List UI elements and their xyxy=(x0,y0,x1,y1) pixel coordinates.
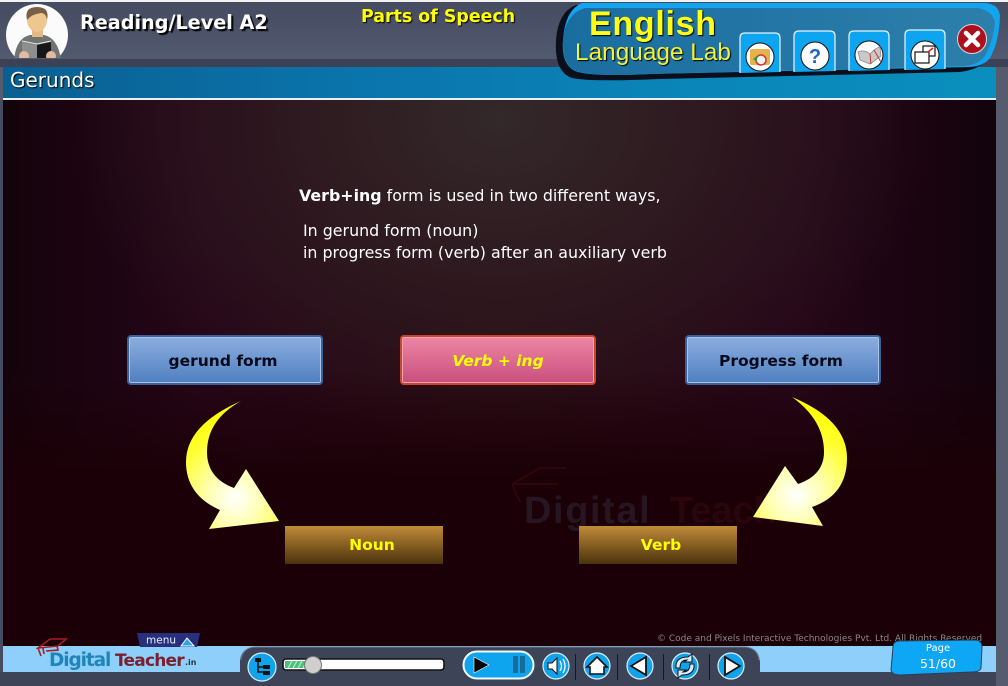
box: gerund form: gerund form xyxy=(168,352,278,370)
box: progress form: Progress form xyxy=(719,352,843,370)
icon: close button xyxy=(958,24,986,54)
arrow: gerund form to noun xyxy=(186,401,279,529)
box: noun: Noun xyxy=(349,536,395,554)
header bar xyxy=(0,2,1008,59)
watermark word teacher: Teacher xyxy=(670,490,813,532)
heading: parts of speech: Parts of Speech xyxy=(361,7,515,27)
toolbar tabs and icons xyxy=(739,24,987,73)
tab: window xyxy=(905,30,945,70)
logo word digital: Digital xyxy=(49,650,110,671)
tab: history xyxy=(740,33,780,73)
title underline xyxy=(3,98,996,100)
button: pause xyxy=(513,656,525,673)
content panel xyxy=(3,100,996,646)
playback control bar xyxy=(240,646,760,682)
title bar xyxy=(3,67,996,98)
title: english: English xyxy=(589,5,717,43)
icon: reading student avatar xyxy=(6,4,68,58)
logo: digital teacher xyxy=(36,638,196,671)
page counter xyxy=(890,640,982,676)
text block: two uses: In gerund form (noun) xyxy=(303,221,478,240)
logo word teacher: Teacher xyxy=(115,651,184,671)
logo cap icon xyxy=(36,638,68,656)
badge: english language lab xyxy=(556,3,1000,80)
box: verb + ing: Verb + ing xyxy=(452,352,544,370)
icon: tree menu xyxy=(248,653,276,681)
title: gerunds: Gerunds xyxy=(10,68,94,92)
footer dark band xyxy=(0,672,996,686)
tab: help: ? xyxy=(809,46,821,68)
logo suffix: .in xyxy=(185,658,196,667)
arrow: progress form to verb xyxy=(753,397,847,526)
text block: introduction: Verb+ing form is used in two different ways, xyxy=(299,186,661,205)
progress slider xyxy=(283,656,444,674)
lower content shade xyxy=(3,370,996,646)
box: progress form xyxy=(685,335,881,385)
text block: two uses xyxy=(303,221,667,262)
title: language lab: Language Lab xyxy=(575,39,731,66)
heading: reading level: Reading/Level A2 xyxy=(80,11,268,34)
text block: two uses: in progress form (verb) after an auxiliary verb xyxy=(303,243,667,262)
watermark: digital teacher xyxy=(512,467,813,532)
tab: book xyxy=(849,31,889,71)
copyright: © Code and Pixels Interactive Technologies Pvt. Ltd. All Rights Reserved xyxy=(657,634,982,644)
icon: home xyxy=(584,653,610,679)
watermark word digital: Digital xyxy=(524,490,651,532)
button: play xyxy=(464,652,534,678)
menu tab xyxy=(137,633,200,647)
page number: 51/60 xyxy=(920,656,956,671)
icon: sound xyxy=(543,653,569,679)
box: noun xyxy=(285,526,443,564)
footer light blue band xyxy=(3,646,996,672)
top edge xyxy=(0,0,1008,2)
box: gerund form xyxy=(127,335,323,385)
header lower band xyxy=(0,59,1008,67)
box: verb + ing xyxy=(400,335,596,385)
watermark cap xyxy=(512,467,566,502)
icon: back xyxy=(627,653,653,679)
icon: refresh xyxy=(672,653,698,679)
page label: Page xyxy=(926,643,950,654)
box: verb xyxy=(579,526,737,564)
icon: next xyxy=(718,653,744,679)
menu label: menu xyxy=(146,634,176,646)
tab: help xyxy=(794,31,835,72)
left edge xyxy=(0,100,3,686)
menu arrow xyxy=(181,638,194,646)
box: verb: Verb xyxy=(641,536,681,554)
